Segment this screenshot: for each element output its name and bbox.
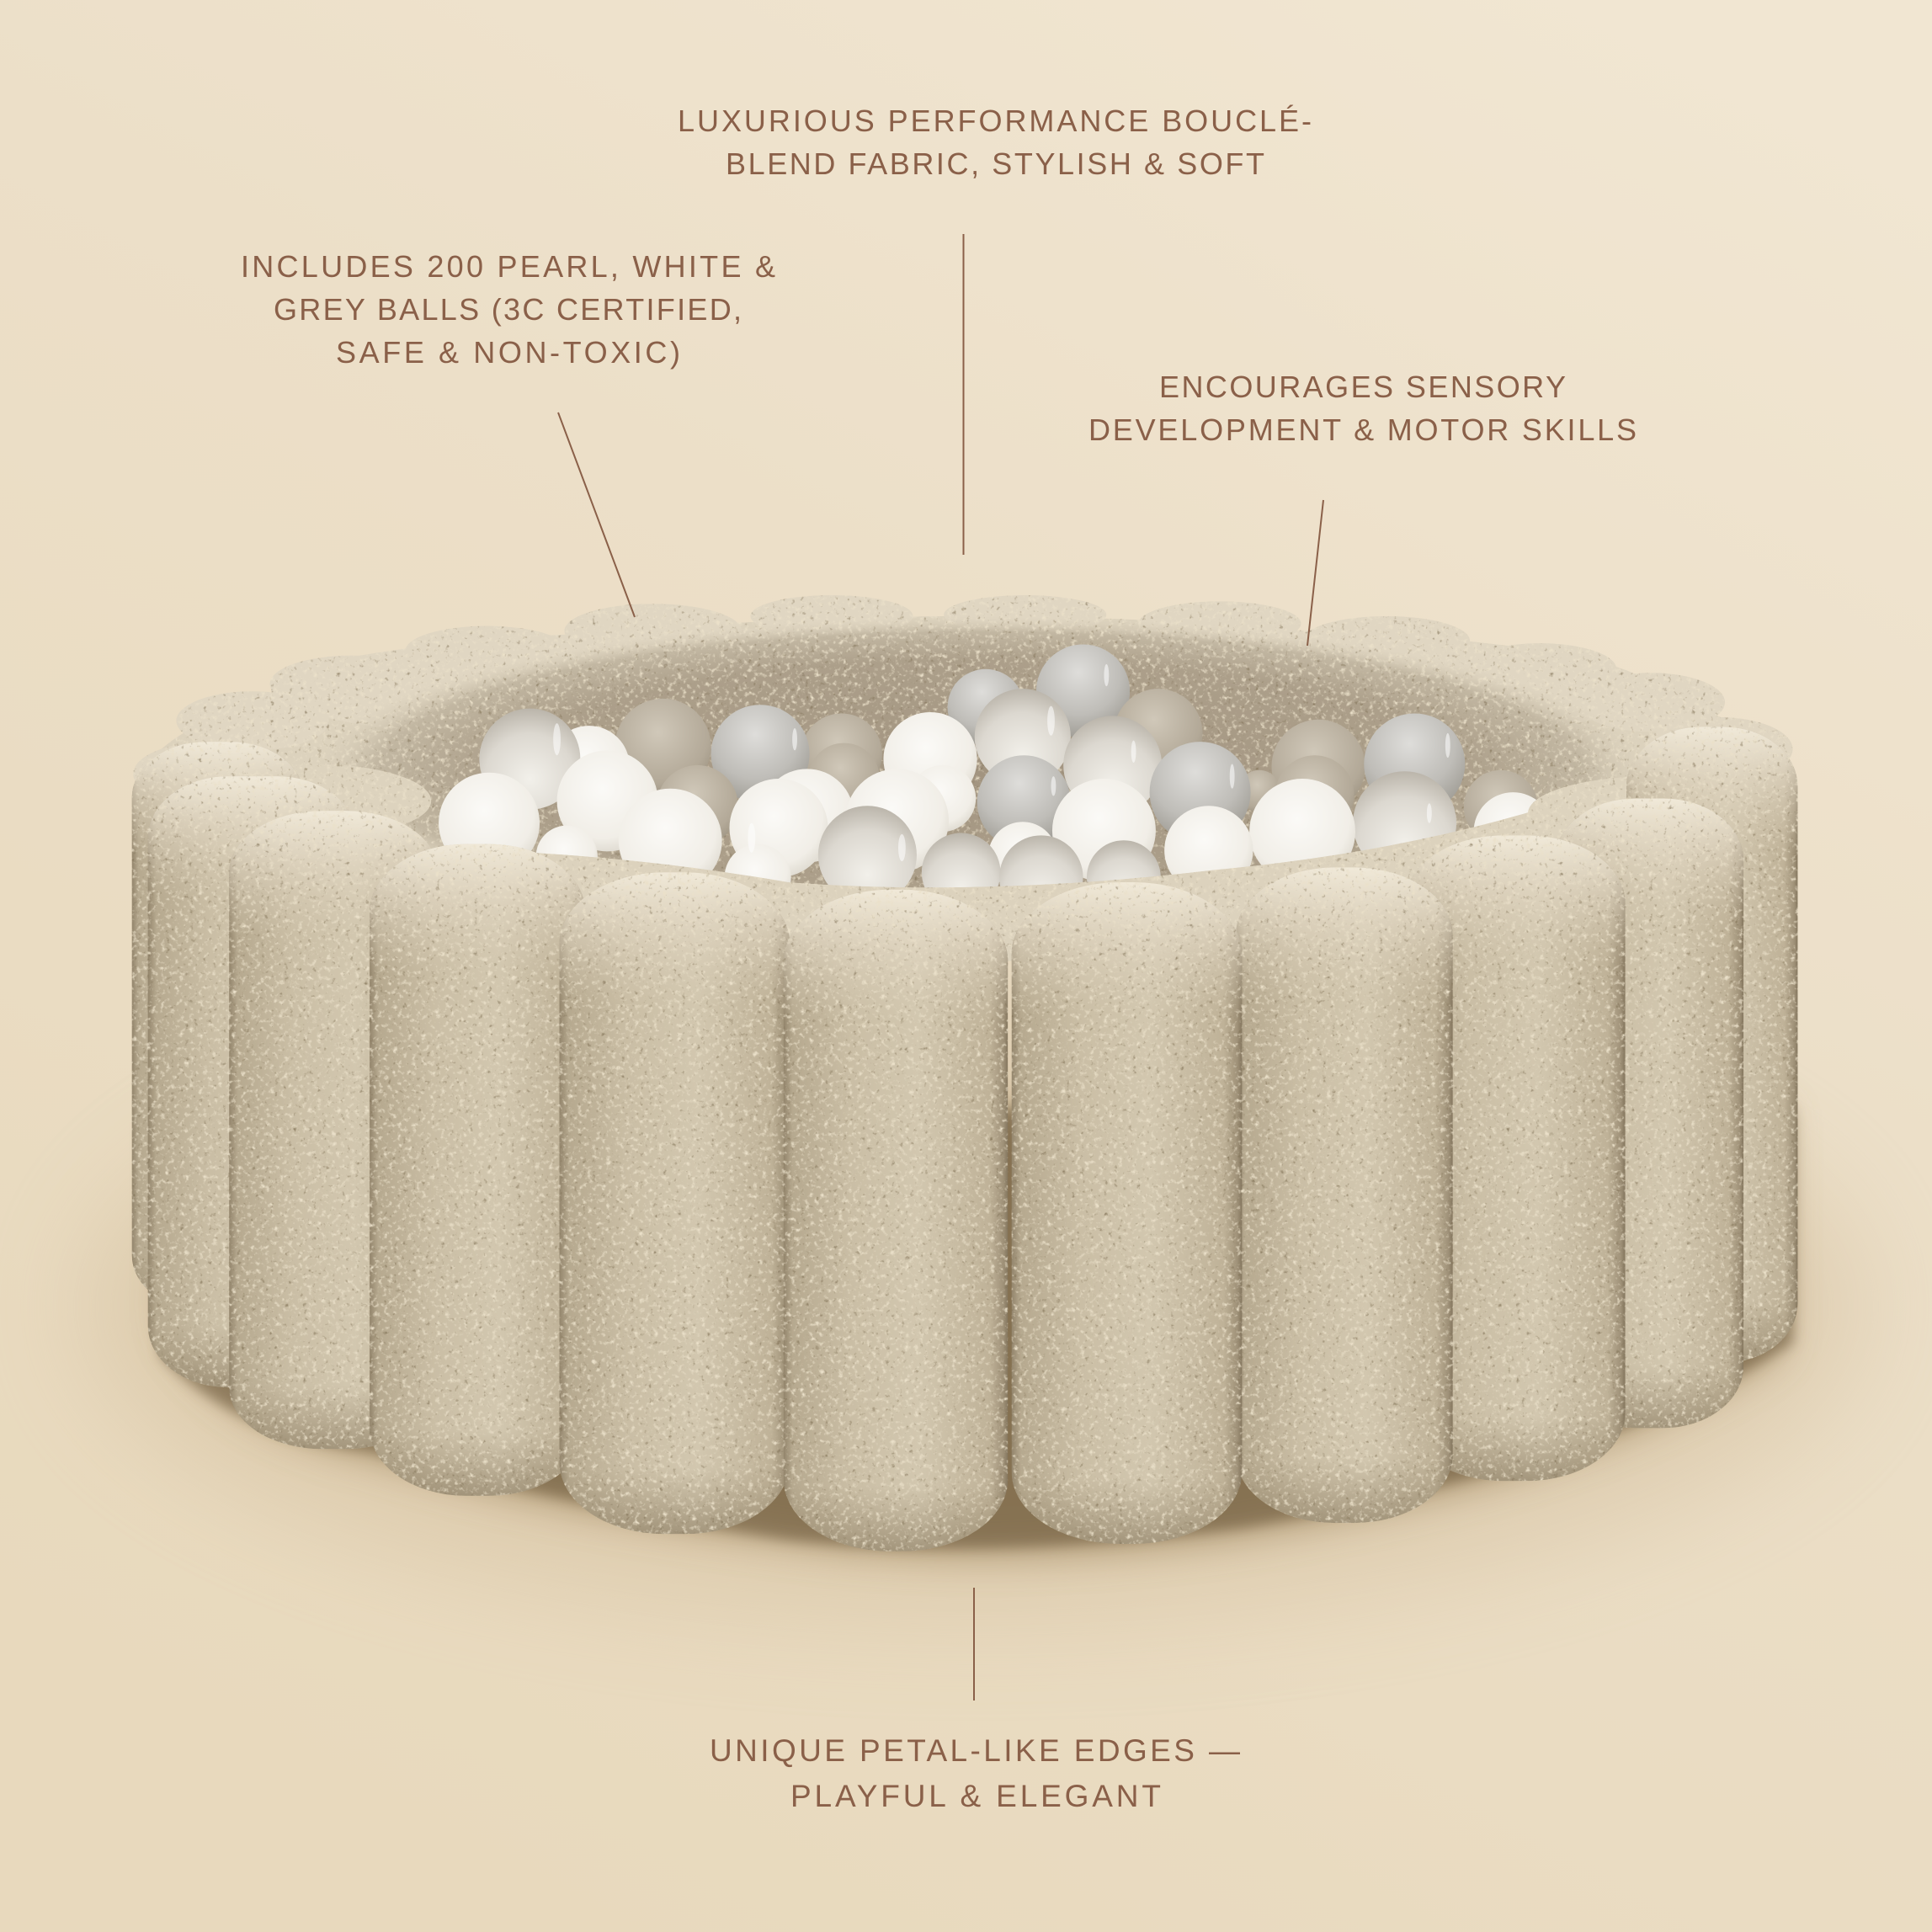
rim scallops (133, 595, 1793, 806)
petal text: PLAYFUL & ELEGANT (790, 1779, 1161, 1813)
petal 10 (1012, 882, 1242, 1544)
fabric text: LUXURIOUS PERFORMANCE BOUCLÉ- (678, 104, 1312, 138)
petal 2 (1626, 727, 1797, 1363)
rim body (139, 616, 1796, 961)
petal 4 (1555, 798, 1743, 1428)
petal leader line (973, 1588, 975, 1700)
fabric leader line (963, 234, 965, 555)
balls text (241, 249, 775, 370)
balls text: INCLUDES 200 PEARL, WHITE & (241, 249, 775, 284)
balls text: SAFE & NON-TOXIC) (336, 335, 680, 370)
petal 7 (370, 844, 585, 1496)
sensory text: ENCOURAGES SENSORY (1159, 370, 1566, 404)
right rim lobes (1528, 776, 1775, 850)
callout: fabric (678, 104, 1312, 555)
petal text: UNIQUE PETAL-LIKE EDGES — (710, 1733, 1240, 1768)
ball highlights (553, 664, 1450, 861)
callout: petal edges (710, 1588, 1240, 1813)
petal 8 (1236, 867, 1453, 1523)
sensory leader line (1307, 500, 1323, 646)
fabric text (678, 104, 1312, 181)
petal text (710, 1733, 1240, 1813)
petal 9 (559, 872, 790, 1534)
callout: sensory (1088, 370, 1637, 646)
sensory text (1088, 370, 1637, 447)
balls leader line (558, 412, 635, 617)
front rim (357, 789, 1602, 961)
upper rim and inner wall (133, 595, 1796, 961)
callout: balls (241, 249, 775, 617)
petal 1 (132, 742, 305, 1311)
floor shadow (86, 998, 1860, 1614)
ball pit product (86, 595, 1860, 1614)
petal 6 (1405, 835, 1626, 1481)
fabric text: BLEND FABRIC, STYLISH & SOFT (726, 146, 1264, 181)
balls (439, 644, 1552, 919)
front structure (132, 727, 1797, 1551)
petal 11 (784, 890, 1008, 1551)
petal 3 (148, 776, 357, 1387)
left rim lobes (197, 764, 431, 838)
sensory text: DEVELOPMENT & MOTOR SKILLS (1088, 412, 1637, 447)
balls text: GREY BALLS (3C CERTIFIED, (274, 292, 742, 327)
inner wall (308, 616, 1651, 932)
petal 5 (229, 811, 439, 1449)
